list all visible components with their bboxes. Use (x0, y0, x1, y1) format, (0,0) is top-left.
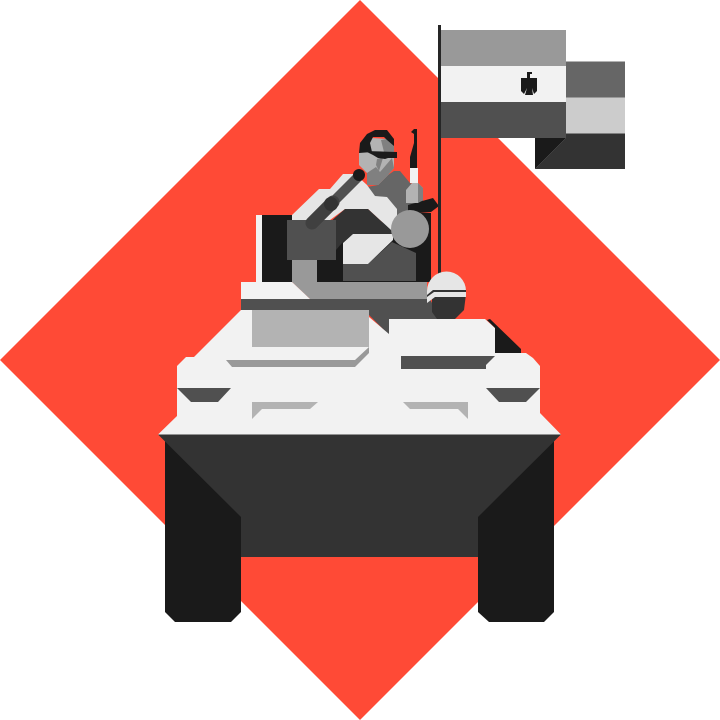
turret block (287, 220, 336, 260)
jacket dark panel (330, 209, 392, 250)
sunglasses (365, 151, 397, 159)
jacket lower panel (343, 242, 416, 281)
hand (406, 183, 423, 203)
torso (367, 171, 423, 225)
hatch strip (226, 347, 369, 367)
face (359, 138, 394, 185)
helmeted crew member (427, 272, 466, 319)
hair (359, 130, 394, 153)
soldier (287, 129, 439, 281)
icon: eagle emblem (521, 72, 537, 95)
black side wedge (487, 319, 521, 353)
hatch panel (252, 310, 369, 347)
right hull vent (403, 402, 468, 419)
flag (441, 30, 625, 169)
hull upper armour (158, 310, 561, 434)
right hull slot (401, 356, 495, 369)
arm (312, 169, 365, 223)
hull lower (158, 434, 561, 557)
left hull vent (252, 402, 318, 419)
flagpole (438, 25, 441, 275)
right wheel (478, 436, 554, 622)
head (359, 130, 397, 185)
left wheel (165, 436, 241, 622)
turret base (241, 260, 440, 335)
flag front section (441, 30, 566, 138)
turret backplate (256, 213, 431, 282)
shoulder circle (391, 210, 429, 248)
right headlight (486, 388, 540, 402)
flag rear section (535, 62, 625, 169)
jacket light panel (292, 174, 397, 231)
left headlight (177, 388, 231, 402)
jacket chest panel (343, 234, 393, 264)
rifle (408, 129, 439, 214)
